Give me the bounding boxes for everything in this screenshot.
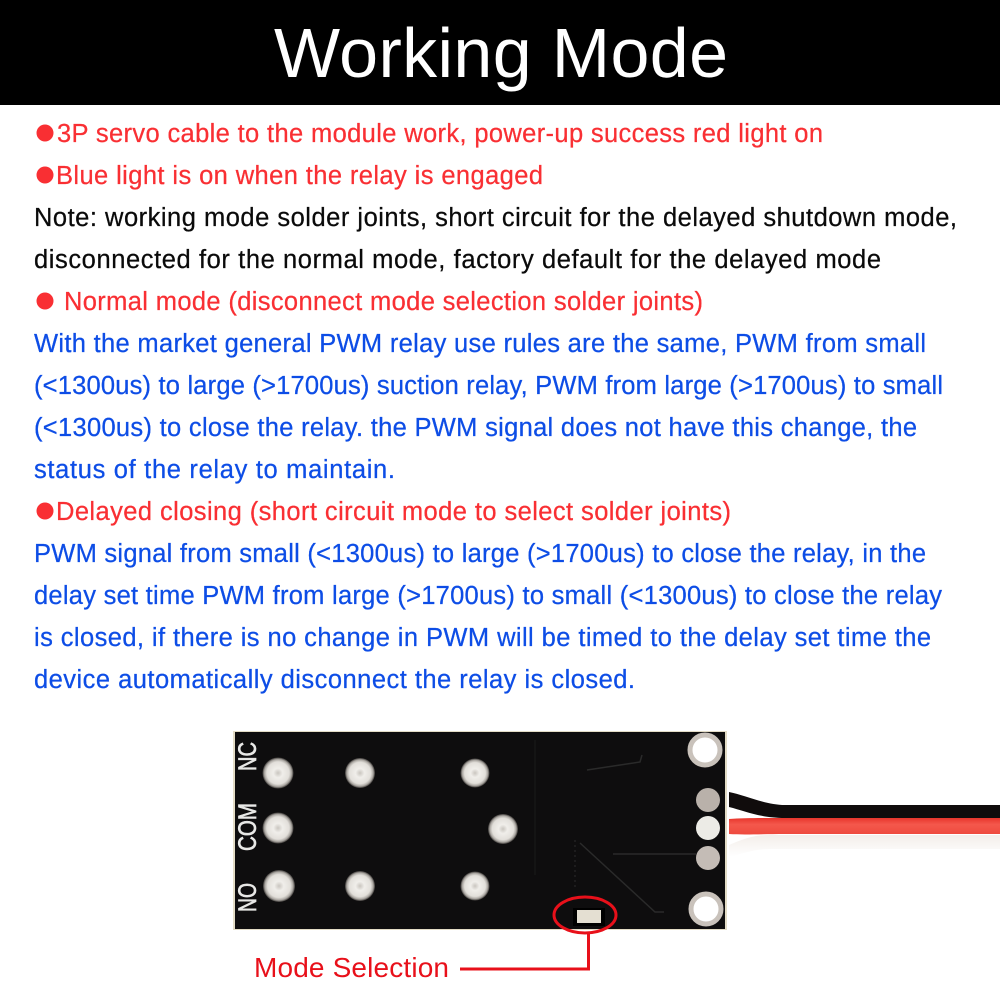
text block: delayed closing description: delay set time PWM from large (>1700us) to small (<1300us) to close the relay — [34, 582, 942, 610]
circuit board — [233, 731, 727, 930]
board labels: NC, COM, NO: COM — [234, 803, 262, 851]
callout: mode selection — [254, 897, 616, 983]
text block: normal mode description — [34, 330, 943, 484]
heading: normal mode: Normal mode (disconnect mode selection solder joints) — [64, 288, 703, 316]
text block: normal mode description: (<1300us) to large (>1700us) suction relay, PWM from large (>1700us) to small — [34, 372, 943, 400]
text block: delayed closing description: device automatically disconnect the relay is closed. — [34, 666, 635, 694]
heading: delayed closing: Delayed closing (short circuit mode to select solder joints) — [56, 498, 731, 526]
text block: note — [34, 204, 957, 274]
callout: mode selection: Mode Selection — [254, 952, 449, 983]
text block: delayed closing description: PWM signal from small (<1300us) to large (>1700us) to close the relay, in the — [34, 540, 926, 568]
text block: delayed closing description — [34, 540, 942, 694]
wires: servo cable — [729, 792, 1000, 857]
text block: normal mode description: status of the relay to maintain. — [34, 456, 395, 484]
relay solder pins — [262, 758, 518, 902]
board labels: NC, COM, NO: NO — [234, 883, 262, 912]
text block: indicator lights — [36, 120, 823, 190]
connector pads — [696, 788, 720, 870]
text block: note: disconnected for the normal mode, factory default for the delayed mode — [34, 246, 881, 274]
board labels: NC, COM, NO: NC — [234, 742, 262, 771]
text block: delayed closing description: is closed, if there is no change in PWM will be timed to the delay set time the — [34, 624, 931, 652]
mounting holes — [690, 735, 721, 924]
title banner: Working Mode — [274, 14, 728, 92]
text block: indicator lights: 3P servo cable to the module work, power-up success red light on — [57, 120, 823, 148]
title banner — [0, 0, 1000, 105]
text block: note: Note: working mode solder joints, short circuit for the delayed shutdown mode, — [34, 204, 957, 232]
board labels: NC, COM, NO — [234, 742, 262, 912]
mode selection solder pad — [573, 908, 605, 926]
text block: normal mode description: (<1300us) to close the relay. the PWM signal does not have this change, the — [34, 414, 917, 442]
text block: normal mode description: With the market general PWM relay use rules are the same, PWM from small — [34, 330, 926, 358]
text block: indicator lights: Blue light is on when the relay is engaged — [56, 162, 543, 190]
circuit traces — [535, 740, 696, 912]
